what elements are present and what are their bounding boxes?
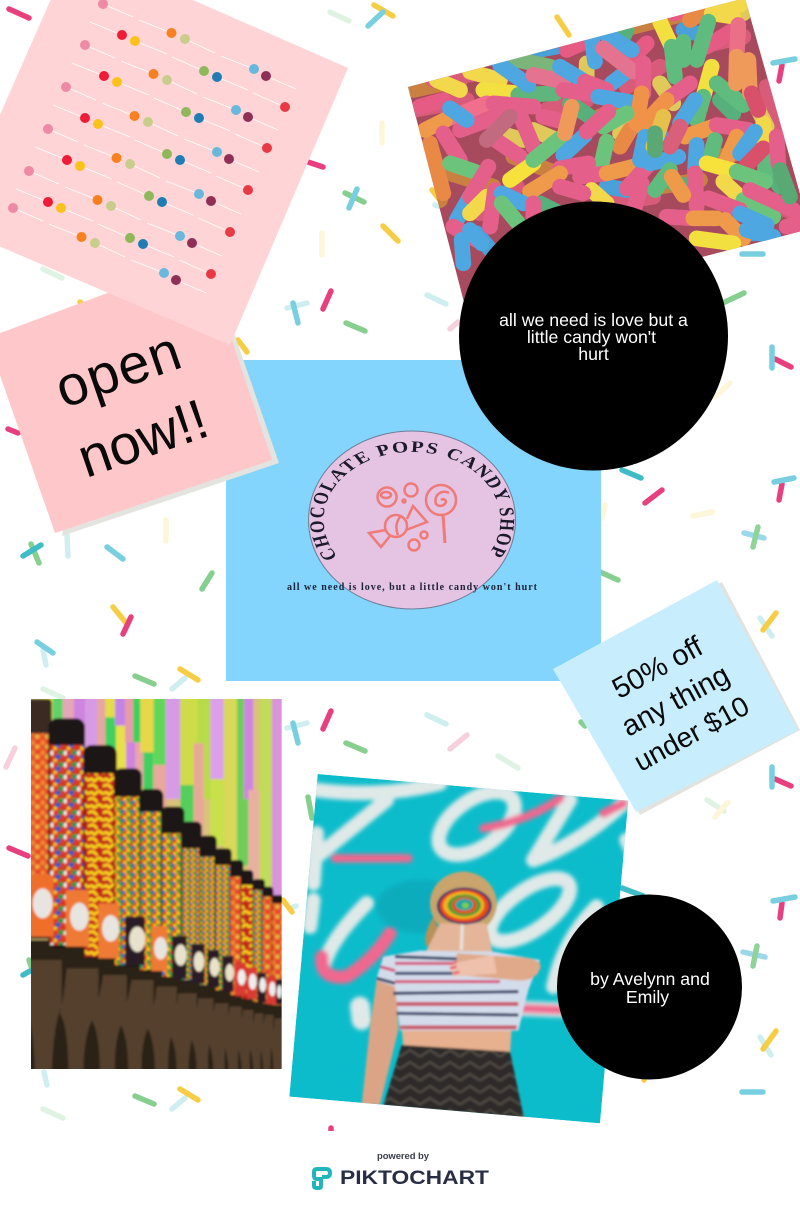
figure <box>362 872 541 1118</box>
circle: credits <box>557 894 742 1080</box>
wordmark: PIKTOCHART <box>340 1168 489 1189</box>
credits text: Emily <box>626 987 669 1007</box>
note text: open now: now!! <box>70 387 216 489</box>
note: open now <box>0 257 279 536</box>
note text: discount: any thing <box>616 659 735 743</box>
blurred neon letters <box>310 779 633 1020</box>
dispenser bottles <box>27 960 287 1073</box>
note text: open now <box>47 318 216 489</box>
credits text: by Avelynn and <box>590 969 710 989</box>
quote text <box>499 310 688 364</box>
logo badge ellipse <box>308 431 516 609</box>
logo arc text: CHOCOLATE POPS CANDY SHOP <box>310 441 514 560</box>
note text: open now: open <box>47 318 188 420</box>
logo candy icons <box>369 484 456 550</box>
note: 50% off <box>553 580 800 815</box>
quote text: all we need is love but a <box>499 310 688 330</box>
panel: lollipops on pink <box>0 0 348 345</box>
panel: logo on blue square <box>226 360 601 681</box>
underlay <box>413 13 767 200</box>
icon: Piktochart logo <box>314 1169 330 1188</box>
dispensers base <box>27 940 287 1073</box>
lollipop <box>437 888 492 924</box>
quote text: little candy won't <box>527 327 656 347</box>
footer: powered by Piktochart <box>314 1151 489 1189</box>
dispenser labels <box>27 875 287 1004</box>
photo: girl with lollipop <box>289 774 633 1123</box>
credits text <box>590 969 710 1007</box>
foreground <box>420 8 733 107</box>
note text: discount <box>607 630 754 777</box>
logo tagline: all we need is love, but a little candy won't hurt <box>287 582 538 593</box>
quote text: hurt <box>578 344 609 364</box>
striped wall <box>27 693 287 953</box>
wall shadow <box>376 880 437 933</box>
photo: sour gummy worms <box>408 0 800 318</box>
photo: candy dispensers <box>27 693 287 1073</box>
note text: discount: 50% off <box>607 630 709 705</box>
dispenser tubes <box>27 699 287 1005</box>
powered by: powered by <box>377 1151 430 1162</box>
circle: love quote <box>459 202 728 470</box>
lollipop rows <box>8 0 296 293</box>
note text: discount: under $10 <box>629 690 754 777</box>
